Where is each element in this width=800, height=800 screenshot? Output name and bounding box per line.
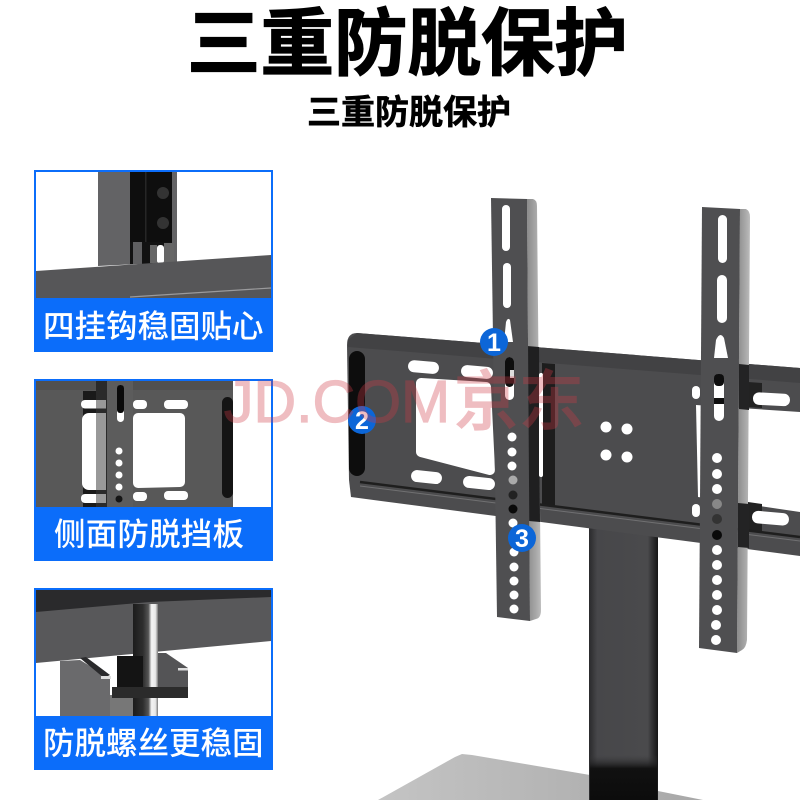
panel: anti-drop screw detail — [34, 589, 273, 770]
panel label bar: side baffle — [34, 507, 273, 561]
panel label bar: screw — [34, 716, 273, 770]
watermark: 京东 — [454, 365, 584, 438]
panel: hook detail — [34, 171, 273, 352]
badge 3 — [508, 524, 536, 553]
left vertical bracket strip — [491, 198, 543, 621]
badge 1 — [480, 328, 508, 357]
panel border: side baffle — [35, 380, 272, 560]
panel photo: four hooks — [35, 171, 272, 301]
panel border: four hooks — [35, 171, 272, 351]
support post — [589, 525, 658, 800]
panel label bar: four hooks — [34, 298, 273, 352]
panel photo: screw — [35, 589, 272, 719]
product: TV mount stand — [347, 198, 800, 800]
badge 2: 2 — [355, 407, 369, 435]
badge 1: 1 — [487, 329, 501, 357]
badge 3: 3 — [515, 525, 529, 553]
panel label text: screw: 防脱螺丝更稳固 — [43, 725, 264, 761]
panel photo: side baffle — [35, 380, 272, 510]
panel label text: four hooks: 四挂钩稳固贴心 — [43, 308, 264, 344]
glass base — [378, 754, 703, 800]
right vertical bracket strip — [699, 207, 750, 653]
watermark — [224, 365, 584, 438]
panel label text: side baffle: 侧面防脱挡板 — [54, 516, 244, 552]
watermark: JD.COM — [224, 369, 450, 435]
horizontal mounting plate — [347, 333, 800, 556]
badge 2 — [348, 406, 376, 435]
panel: side baffle detail — [34, 380, 273, 561]
panel border: screw — [35, 589, 272, 769]
title: 三重防脱保护 — [187, 2, 628, 85]
subtitle: 三重防脱保护 — [307, 94, 511, 132]
